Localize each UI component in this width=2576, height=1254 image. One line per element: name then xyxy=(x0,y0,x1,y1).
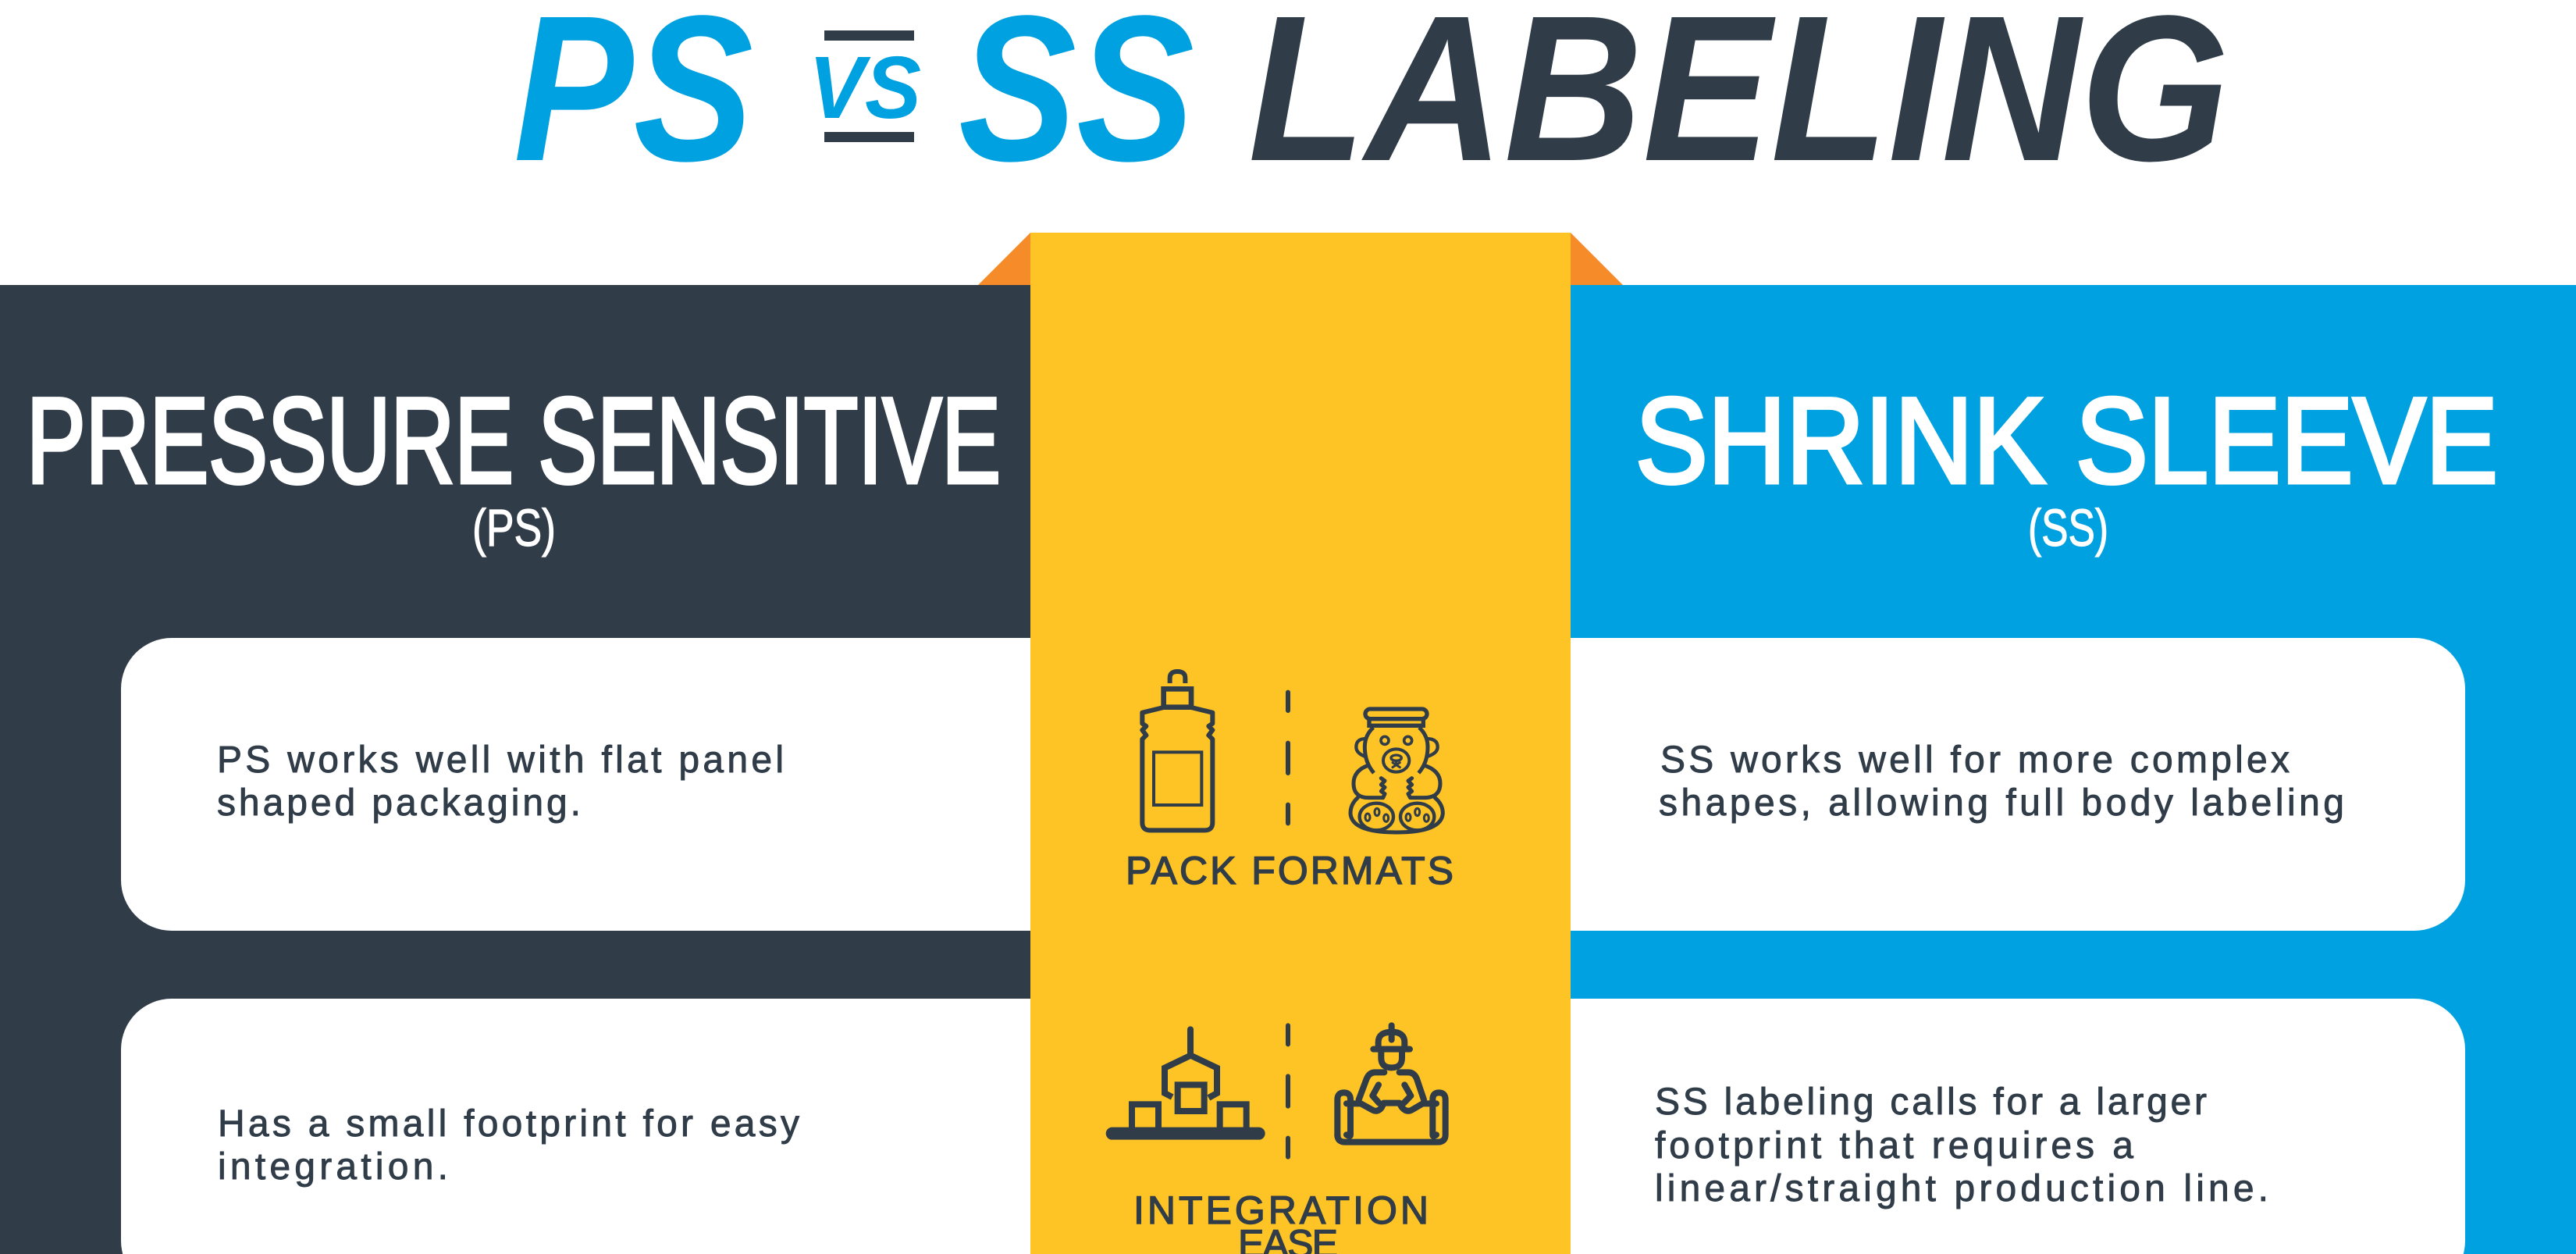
icon: divider integration xyxy=(1281,1025,1295,1157)
icon: engineer with blueprint xyxy=(1337,1025,1446,1142)
panel: shrink sleeve xyxy=(1571,285,2576,1254)
card: PS pack formats: shaped packaging. xyxy=(217,782,581,824)
title: VS xyxy=(809,38,921,137)
heading: shrink sleeve: SHRINK SLEEVE xyxy=(1635,373,2498,509)
icon: bottle xyxy=(1142,672,1212,830)
label: integration ease xyxy=(1133,1188,1429,1254)
label: pack formats: PACK FORMATS xyxy=(1126,849,1453,892)
card: SS integration ease: linear/straight production line. xyxy=(1655,1168,2268,1209)
panel: center column xyxy=(1030,233,1571,1254)
card: PS integration ease: Has a small footprint for easy xyxy=(218,1103,799,1145)
label: integration ease: INTEGRATION xyxy=(1133,1188,1429,1232)
card: PS pack formats: PS works well with flat panel xyxy=(217,739,784,781)
title xyxy=(514,0,2229,205)
card: SS integration ease: footprint that requires a xyxy=(1655,1125,2133,1167)
subheading: SS: (SS) xyxy=(2028,499,2108,558)
card: PS integration ease: integration. xyxy=(218,1146,448,1188)
card: PS integration ease xyxy=(121,999,1030,1254)
card: PS pack formats xyxy=(121,638,1030,931)
card: SS pack formats: shapes, allowing full body labeling xyxy=(1659,782,2344,824)
orange folds xyxy=(978,233,1623,285)
card: SS pack formats xyxy=(1571,638,2465,931)
heading: pressure sensitive: PRESSURE SENSITIVE xyxy=(27,373,1001,509)
icon: bear jar xyxy=(1350,709,1443,832)
card: SS integration ease xyxy=(1571,999,2465,1254)
icon: divider pack formats xyxy=(1281,693,1295,823)
card: SS integration ease: SS labeling calls for a larger xyxy=(1655,1081,2207,1123)
subheading: PS: (PS) xyxy=(472,499,556,558)
panel: pressure sensitive xyxy=(0,285,1030,1254)
card: SS pack formats: SS works well for more complex xyxy=(1660,739,2290,781)
icon: conveyor xyxy=(1106,1029,1265,1140)
